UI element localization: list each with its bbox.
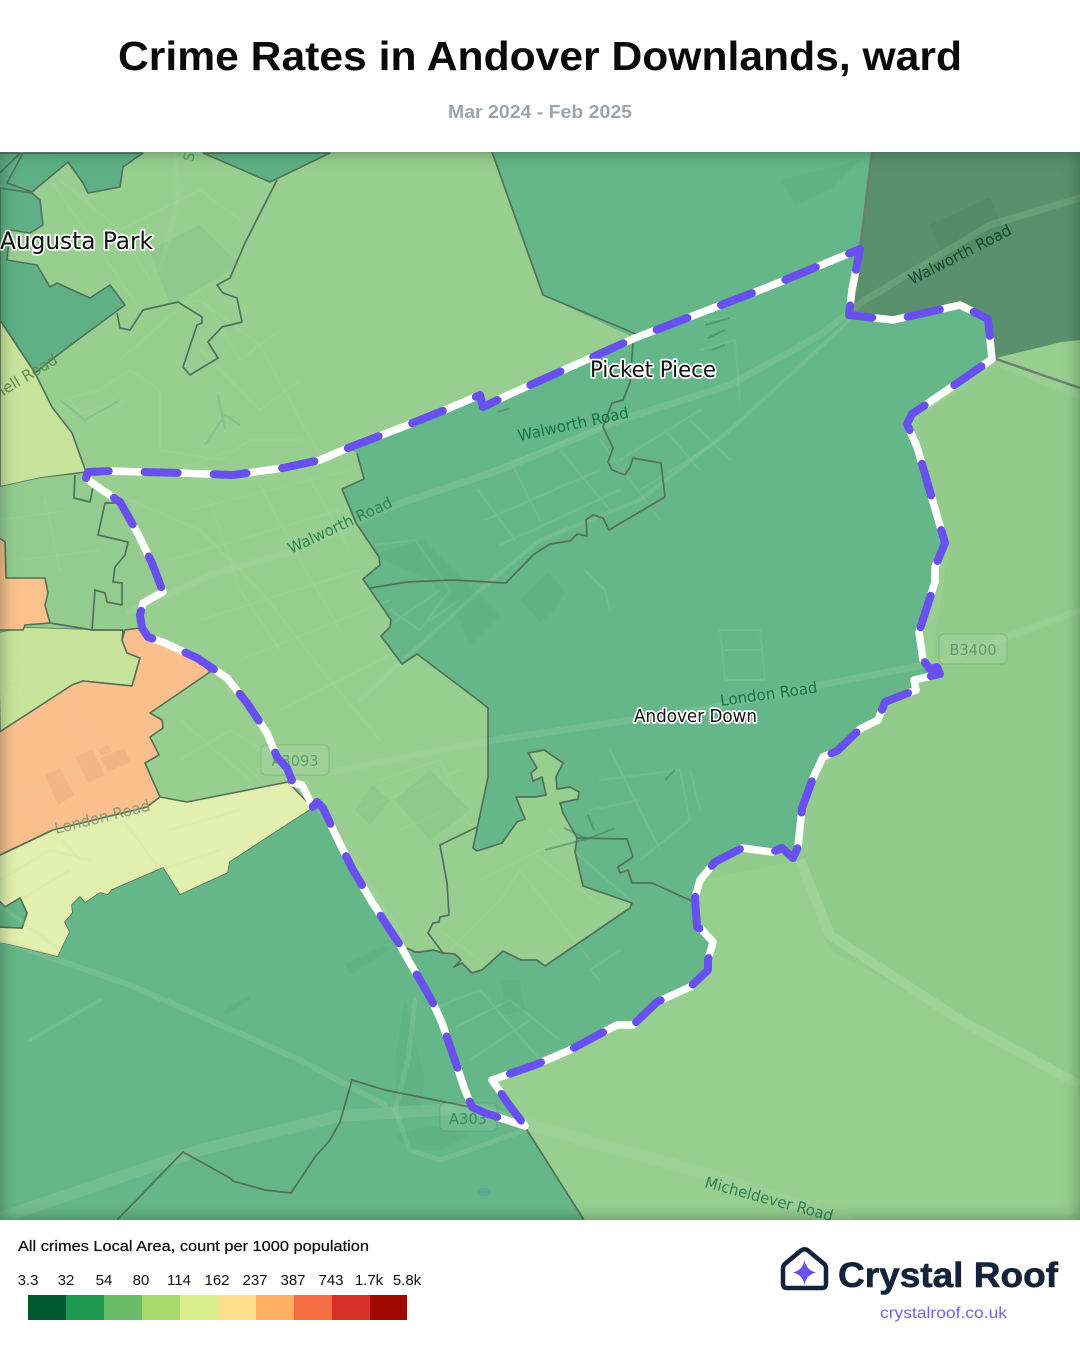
place label: Andover Down: Andover Down — [634, 706, 757, 727]
west slightly darker green area — [0, 473, 163, 632]
legend tick labels: 743 — [318, 1272, 344, 1289]
street network — [0, 152, 1080, 1222]
website url: crystalroof.co.uk — [880, 1305, 1008, 1322]
legend tick labels: 32 — [58, 1272, 74, 1289]
south-west mid green area — [0, 808, 584, 1220]
legend tick labels — [18, 1272, 422, 1289]
road badge: A303 — [440, 1103, 497, 1131]
road badge: A3093 — [261, 745, 329, 775]
legend — [18, 1238, 422, 1320]
small mid green patch — [0, 898, 27, 928]
legend tick labels: 114 — [167, 1272, 191, 1289]
north-east buildings — [930, 197, 1005, 262]
road badge: A3093: A3093 — [272, 752, 318, 770]
road label: Walworth Road north-east: Walworth Road — [906, 221, 1014, 289]
south-east fields — [700, 365, 1080, 1090]
main roads — [0, 152, 1080, 1222]
west orange area, high crime — [0, 628, 210, 856]
map edge shading — [0, 152, 1080, 1220]
subtitle: date range: Mar 2024 - Feb 2025 — [448, 102, 632, 122]
title: Crime Rates in Andover Downlands, ward — [118, 33, 962, 79]
map — [0, 152, 1080, 1220]
north-east dark green area — [849, 152, 1080, 359]
ward mid green area — [342, 249, 992, 1126]
legend title: All crimes Local Area, count per 1000 population — [18, 1238, 369, 1255]
legend tick labels: 5.8k — [393, 1272, 422, 1289]
icon: house with star — [783, 1249, 826, 1288]
legend tick labels: 387 — [280, 1272, 306, 1289]
ward boundary: white and purple dashed outline — [86, 249, 992, 1126]
road badge: B3400: B3400 — [950, 641, 996, 659]
place label: Picket Piece: Picket Piece — [590, 358, 716, 383]
legend tick labels: 80 — [133, 1272, 149, 1289]
orange area buildings — [45, 745, 130, 805]
legend tick labels: 1.7k — [355, 1272, 384, 1289]
legend tick labels: 237 — [242, 1272, 268, 1289]
map base: low crime light green — [0, 152, 1080, 1220]
road badge: B3400 — [939, 634, 1007, 664]
legend tick labels: 54 — [96, 1272, 112, 1289]
legend tick labels: 162 — [204, 1272, 230, 1289]
north-west mid green areas — [0, 153, 330, 373]
area boundary lines — [50, 152, 1080, 1220]
south-west pale yellow area — [0, 782, 313, 957]
north-middle mid green area — [492, 152, 872, 338]
south-east lighter road band — [800, 860, 1080, 1085]
place label: Augusta Park: Augusta Park — [0, 227, 153, 255]
road label: Walworth Road centre: Walworth Road — [516, 404, 630, 445]
north-west corner mid green backing — [0, 152, 143, 193]
residential streets — [0, 180, 765, 1060]
west orange small area — [0, 537, 50, 630]
road label: London Road east: London Road — [719, 678, 819, 710]
pond — [477, 1188, 491, 1196]
small car parks and paths — [60, 318, 730, 850]
road label: London Road west: London Road — [53, 797, 152, 838]
road label: Walworth Road west: Walworth Road — [285, 494, 395, 558]
brand logo and url — [780, 1247, 1058, 1322]
legend colour scale — [28, 1295, 407, 1320]
brand name: Crystal Roof — [838, 1256, 1058, 1295]
road badge: A303: A303 — [449, 1110, 487, 1128]
legend tick labels: 3.3 — [18, 1272, 38, 1289]
paler buildings and grounds — [150, 160, 860, 1150]
west yellow-green areas — [0, 320, 140, 733]
